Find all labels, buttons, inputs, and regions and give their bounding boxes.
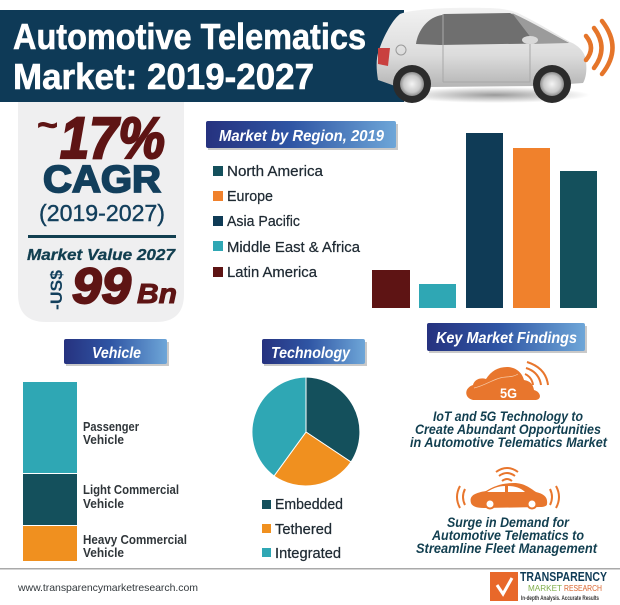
header band xyxy=(0,10,404,102)
vehicle labels: Vehicle xyxy=(83,546,124,560)
CAGR period: (2019-2027) xyxy=(39,200,165,226)
CAGR label: CAGR xyxy=(43,159,161,201)
vehicle labels: Heavy Commercial xyxy=(83,533,187,547)
heading: Key Market Findings xyxy=(427,323,587,353)
logo: Transparency Market Research: RESEARCH xyxy=(564,584,602,593)
heading: Technology: Technology xyxy=(271,345,351,362)
divider xyxy=(28,235,176,238)
finding text: IoT and 5G: IoT and 5G Technology to xyxy=(433,409,583,424)
icon: 5G cloud: 5G xyxy=(500,385,517,401)
illustration: silver car with signal waves xyxy=(377,8,612,103)
legend: regions: Latin America xyxy=(227,264,318,281)
heading: Vehicle: Vehicle xyxy=(92,345,141,362)
finding text: fleet management: Streamline Fleet Management xyxy=(416,541,597,556)
legend: regions xyxy=(213,163,361,281)
legend: regions: Middle East & Africa xyxy=(227,239,361,256)
CAGR percentage: ~ xyxy=(37,104,58,145)
legend: technology: Embedded xyxy=(275,496,343,513)
CAGR percentage: 17% xyxy=(60,106,165,171)
heading: Vehicle xyxy=(64,339,169,366)
legend: technology xyxy=(262,496,343,562)
heading: Key Market Findings: Key Market Findings xyxy=(436,330,577,347)
heading: Market by Region: Market by Region, 2019 xyxy=(219,128,384,145)
title: Market: 2019-2027 xyxy=(13,56,314,97)
icon: 5G cloud xyxy=(466,362,548,401)
finding text: IoT and 5G xyxy=(410,409,607,450)
bar chart: market by region xyxy=(372,133,597,308)
legend: technology: Tethered xyxy=(275,521,332,538)
finding text: fleet management: Automotive Telematics to xyxy=(431,528,584,543)
finding text: fleet management xyxy=(416,515,597,556)
legend: regions: North America xyxy=(227,163,324,180)
stacked bar: vehicle xyxy=(23,382,77,561)
market value number: 99 xyxy=(72,258,131,314)
footer URL: www.transparencymarketresearch.com xyxy=(17,582,198,594)
market value unit: Bn xyxy=(137,278,177,309)
finding text: IoT and 5G: in Automotive Telematics Market xyxy=(410,435,607,450)
vehicle labels: Passenger xyxy=(83,420,139,434)
finding text: IoT and 5G: Create Abundant Opportunities xyxy=(415,422,601,437)
vehicle labels xyxy=(83,420,187,560)
heading: Market by Region xyxy=(206,121,398,150)
market value label: Market Value 2027 xyxy=(27,247,177,264)
pie chart: technology xyxy=(252,377,360,486)
legend: technology: Integrated xyxy=(275,545,341,562)
vehicle labels: Vehicle xyxy=(83,433,124,447)
title xyxy=(13,16,366,97)
panel: CAGR and market value xyxy=(18,102,184,322)
legend: regions: Europe xyxy=(227,188,273,205)
vehicle labels: Vehicle xyxy=(83,497,124,511)
logo: Transparency Market Research xyxy=(490,570,608,602)
currency: -US$ xyxy=(47,269,66,310)
footer rule xyxy=(0,568,620,570)
title: Automotive Telematics xyxy=(13,16,366,57)
vehicle labels: Light Commercial xyxy=(83,483,179,497)
legend: regions: Asia Pacific xyxy=(227,213,300,230)
icon: connected car xyxy=(457,468,559,508)
finding text: fleet management: Surge in Demand for xyxy=(447,515,570,530)
heading: Technology xyxy=(262,339,367,366)
logo: Transparency Market Research: MARKET xyxy=(528,584,562,593)
